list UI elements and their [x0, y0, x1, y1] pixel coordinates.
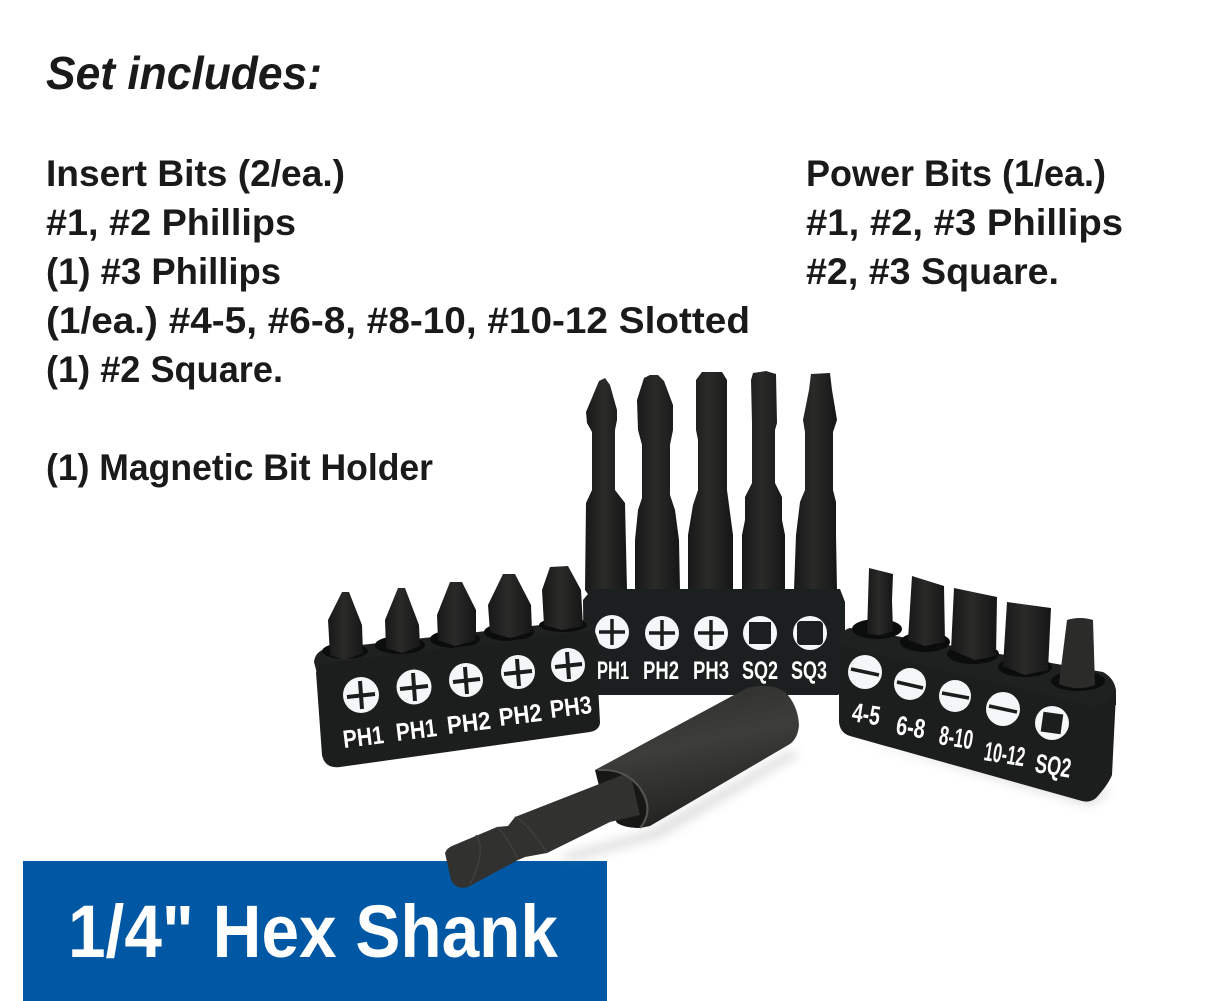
holder front face — [839, 646, 1116, 802]
sleeve lip — [598, 770, 648, 828]
text block: insert bits: (1) #2 Square. — [46, 349, 283, 390]
phillips icon 2 — [396, 670, 432, 704]
banner: 1/4 inch hex shank — [23, 861, 607, 1001]
phillips bit 1 — [328, 592, 363, 660]
shank facets — [470, 817, 547, 884]
text block: insert bits: (1/ea.) #4-5, #6-8, #8-10, #10-12 Slotted — [46, 300, 750, 341]
text block: power bits: #2, #3 Square. — [806, 251, 1059, 292]
holder holes — [852, 619, 1105, 691]
right labels: 8-10 — [937, 720, 975, 755]
text block: magnetic bit holder: (1) Magnetic Bit Holder — [46, 447, 433, 488]
sleeve — [595, 686, 799, 828]
text block: power bits — [806, 153, 1123, 292]
square bit: SQ2 — [1059, 618, 1095, 688]
holder top surface — [840, 628, 1116, 715]
power bit: SQ3 — [794, 373, 837, 597]
center labels: SQ2 — [742, 657, 778, 685]
square icon: SQ2 — [743, 616, 777, 650]
center labels: SQ3 — [791, 657, 827, 685]
text block: insert bits: Insert Bits (2/ea.) — [46, 153, 345, 194]
holder holes — [322, 618, 587, 659]
text block: power bits: Power Bits (1/ea.) — [806, 153, 1106, 194]
center labels: PH2 — [643, 657, 679, 685]
right labels: SQ2 — [1033, 748, 1073, 784]
text block: insert bits: (1) #3 Phillips — [46, 251, 281, 292]
holder top surface — [314, 620, 600, 685]
hex shank and tip — [445, 772, 640, 888]
cast shadow — [560, 750, 800, 862]
center labels — [597, 657, 827, 685]
icon: slot 4-5 — [848, 655, 882, 689]
holder body — [583, 589, 845, 695]
text block: power bits: #1, #2, #3 Phillips — [806, 202, 1123, 243]
icon: slot 6-8 — [894, 668, 926, 700]
slotted bit: 4-5 — [867, 568, 893, 635]
phillips bit 4 — [488, 574, 532, 638]
phillips icon 5 — [551, 648, 585, 682]
power bit: PH3 — [688, 372, 733, 597]
phillips icon: PH3 — [694, 616, 728, 650]
phillips bit 5 — [542, 566, 583, 630]
left labels: PH1 — [341, 721, 385, 754]
center labels: PH3 — [693, 657, 729, 685]
center labels: PH1 — [597, 657, 629, 685]
left labels: PH3 — [548, 691, 593, 724]
phillips icon 3 — [449, 663, 483, 697]
right labels — [850, 697, 1073, 784]
phillips icon: PH1 — [595, 615, 629, 649]
icon: slot 8-10 — [939, 680, 971, 712]
left labels: PH1 — [394, 714, 438, 747]
icon: slot 10-12 — [986, 692, 1020, 726]
text block: insert bits: #1, #2 Phillips — [46, 202, 296, 243]
slotted bit: 8-10 — [951, 588, 997, 660]
holder shadow — [845, 735, 1112, 806]
power bit: SQ2 — [742, 371, 785, 597]
heading: set includes: Set includes: — [46, 47, 322, 99]
power bit: PH1 — [585, 378, 627, 597]
banner: 1/4 inch hex shank: 1/4" Hex Shank — [68, 890, 559, 973]
phillips icon: PH2 — [645, 616, 679, 650]
right labels: 10-12 — [982, 736, 1027, 772]
phillips icon 1 — [343, 677, 379, 713]
right labels: 4-5 — [850, 697, 882, 731]
power bit: PH2 — [635, 375, 680, 597]
text block: insert bits — [46, 153, 750, 390]
phillips bit 3 — [437, 582, 476, 646]
right holder: slotted insert bits — [839, 568, 1116, 806]
slotted bit: 6-8 — [908, 576, 945, 646]
left labels: PH2 — [497, 699, 543, 732]
left labels: PH2 — [445, 707, 492, 740]
left holder: phillips insert bits — [314, 566, 600, 767]
magnetic bit holder — [445, 686, 800, 888]
right labels: 6-8 — [894, 710, 927, 744]
phillips bit 2 — [385, 588, 420, 653]
slotted bit: 10-12 — [1003, 602, 1051, 675]
icon: square SQ2 — [1035, 706, 1069, 740]
square icon: SQ3 — [793, 616, 827, 650]
holder front face — [316, 630, 600, 767]
center holder: power bits — [583, 371, 845, 695]
sleeve opening — [595, 770, 648, 828]
phillips icon 4 — [501, 655, 535, 689]
left labels — [341, 691, 593, 754]
